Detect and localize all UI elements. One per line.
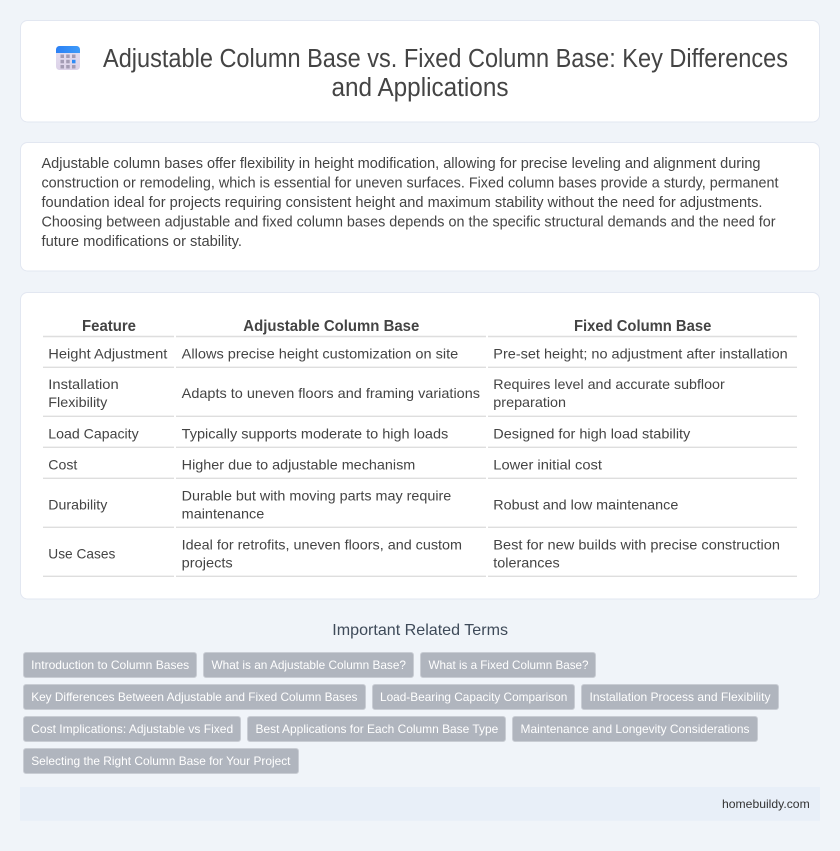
- table row: use cases: Best for new builds with precise construction: [493, 536, 780, 552]
- tag: Key Differences Between Adjustable and Fixed Column Bases: [31, 690, 357, 704]
- tag: Best Applications for Each Column Base Type: [256, 722, 499, 736]
- panel: introduction: [20, 142, 820, 271]
- table row: use cases: Ideal for retrofits, uneven floors, and custom: [182, 536, 462, 552]
- panel: comparison table: [20, 292, 820, 599]
- text block: introduction paragraph: construction or remodeling, which is essential for uneven surfaces. Fixed column bases provide a sturdy, permanent: [42, 176, 778, 192]
- table row: installation flexibility: Requires level and accurate subfloor: [493, 376, 725, 392]
- table row: durability: maintenance: [182, 505, 265, 521]
- title: Adjustable Column Base vs. Fixed Column Base: Key Differences: [103, 45, 788, 73]
- table row: installation flexibility: Adapts to uneven floors and framing variations: [182, 385, 480, 401]
- panel: related term tags: [24, 652, 778, 774]
- tag: [420, 652, 596, 678]
- panel: footer: [20, 787, 820, 821]
- tag: [24, 652, 196, 678]
- table row: cost: Lower initial cost: [493, 456, 602, 472]
- table row: cost: Cost: [48, 456, 77, 472]
- tag: [24, 748, 298, 774]
- tag: [24, 716, 240, 742]
- tag: [248, 716, 506, 742]
- table row: height adjustment: [43, 345, 797, 367]
- panel: header: [20, 20, 820, 122]
- tag: What is an Adjustable Column Base?: [212, 658, 406, 672]
- table row: use cases: Use Cases: [48, 545, 115, 561]
- tag: [204, 652, 414, 678]
- table row: height adjustment: Pre-set height; no adjustment after installation: [493, 345, 788, 361]
- table header row: Fixed Column Base: [574, 318, 712, 335]
- heading: important related terms: Important Related Terms: [332, 622, 508, 639]
- table row: durability: Durability: [48, 496, 107, 512]
- table row: installation flexibility: preparation: [493, 394, 566, 410]
- table row: use cases: projects: [182, 554, 233, 570]
- table row: use cases: tolerances: [493, 554, 560, 570]
- table row: load capacity: [43, 425, 797, 447]
- table row: cost: [43, 456, 797, 478]
- tag: Selecting the Right Column Base for Your Project: [31, 754, 291, 768]
- tag: Cost Implications: Adjustable vs Fixed: [31, 722, 233, 736]
- tag: [24, 684, 366, 710]
- tag: [372, 684, 574, 710]
- table row: load capacity: Typically supports moderate to high loads: [182, 425, 448, 441]
- table row: installation flexibility: [43, 376, 797, 416]
- table row: durability: [43, 487, 797, 527]
- table row: height adjustment: Allows precise height customization on site: [182, 345, 459, 361]
- table row: durability: Robust and low maintenance: [493, 496, 679, 512]
- text block: introduction paragraph: Adjustable column bases offer flexibility in height modification, allowing for precise leveling and alignment during: [42, 156, 760, 172]
- table row: cost: Higher due to adjustable mechanism: [182, 456, 415, 472]
- icon: calendar grid: [56, 46, 80, 70]
- text block: introduction paragraph: future modifications or stability.: [42, 234, 242, 250]
- footer source label: homebuildy.com: [722, 797, 810, 811]
- table header row: Feature: [82, 318, 136, 335]
- title: [103, 45, 788, 102]
- table row: use cases: [43, 536, 797, 576]
- table row: durability: Durable but with moving parts may require: [182, 487, 452, 503]
- text block: introduction paragraph: Choosing between adjustable and fixed column bases depends on the specific structural demands and the need for: [42, 214, 776, 230]
- tag: [512, 716, 758, 742]
- table header row: [43, 318, 797, 336]
- table row: load capacity: Load Capacity: [48, 425, 139, 441]
- text block: introduction paragraph: foundation ideal for projects requiring consistent height and maximum stability without the need for adjustments.: [42, 195, 762, 211]
- tag: Introduction to Column Bases: [31, 658, 189, 672]
- table row: height adjustment: Height Adjustment: [48, 345, 167, 361]
- tag: What is a Fixed Column Base?: [428, 658, 589, 672]
- text block: introduction paragraph: [42, 156, 778, 250]
- tag: Load-Bearing Capacity Comparison: [380, 690, 567, 704]
- tag: [582, 684, 778, 710]
- table row: installation flexibility: Flexibility: [48, 394, 107, 410]
- table row: installation flexibility: Installation: [48, 376, 119, 392]
- tag: Maintenance and Longevity Considerations: [520, 722, 750, 736]
- table header row: Adjustable Column Base: [243, 318, 420, 335]
- tag: Installation Process and Flexibility: [590, 690, 770, 704]
- title: and Applications: [332, 74, 508, 102]
- table row: load capacity: Designed for high load stability: [493, 425, 690, 441]
